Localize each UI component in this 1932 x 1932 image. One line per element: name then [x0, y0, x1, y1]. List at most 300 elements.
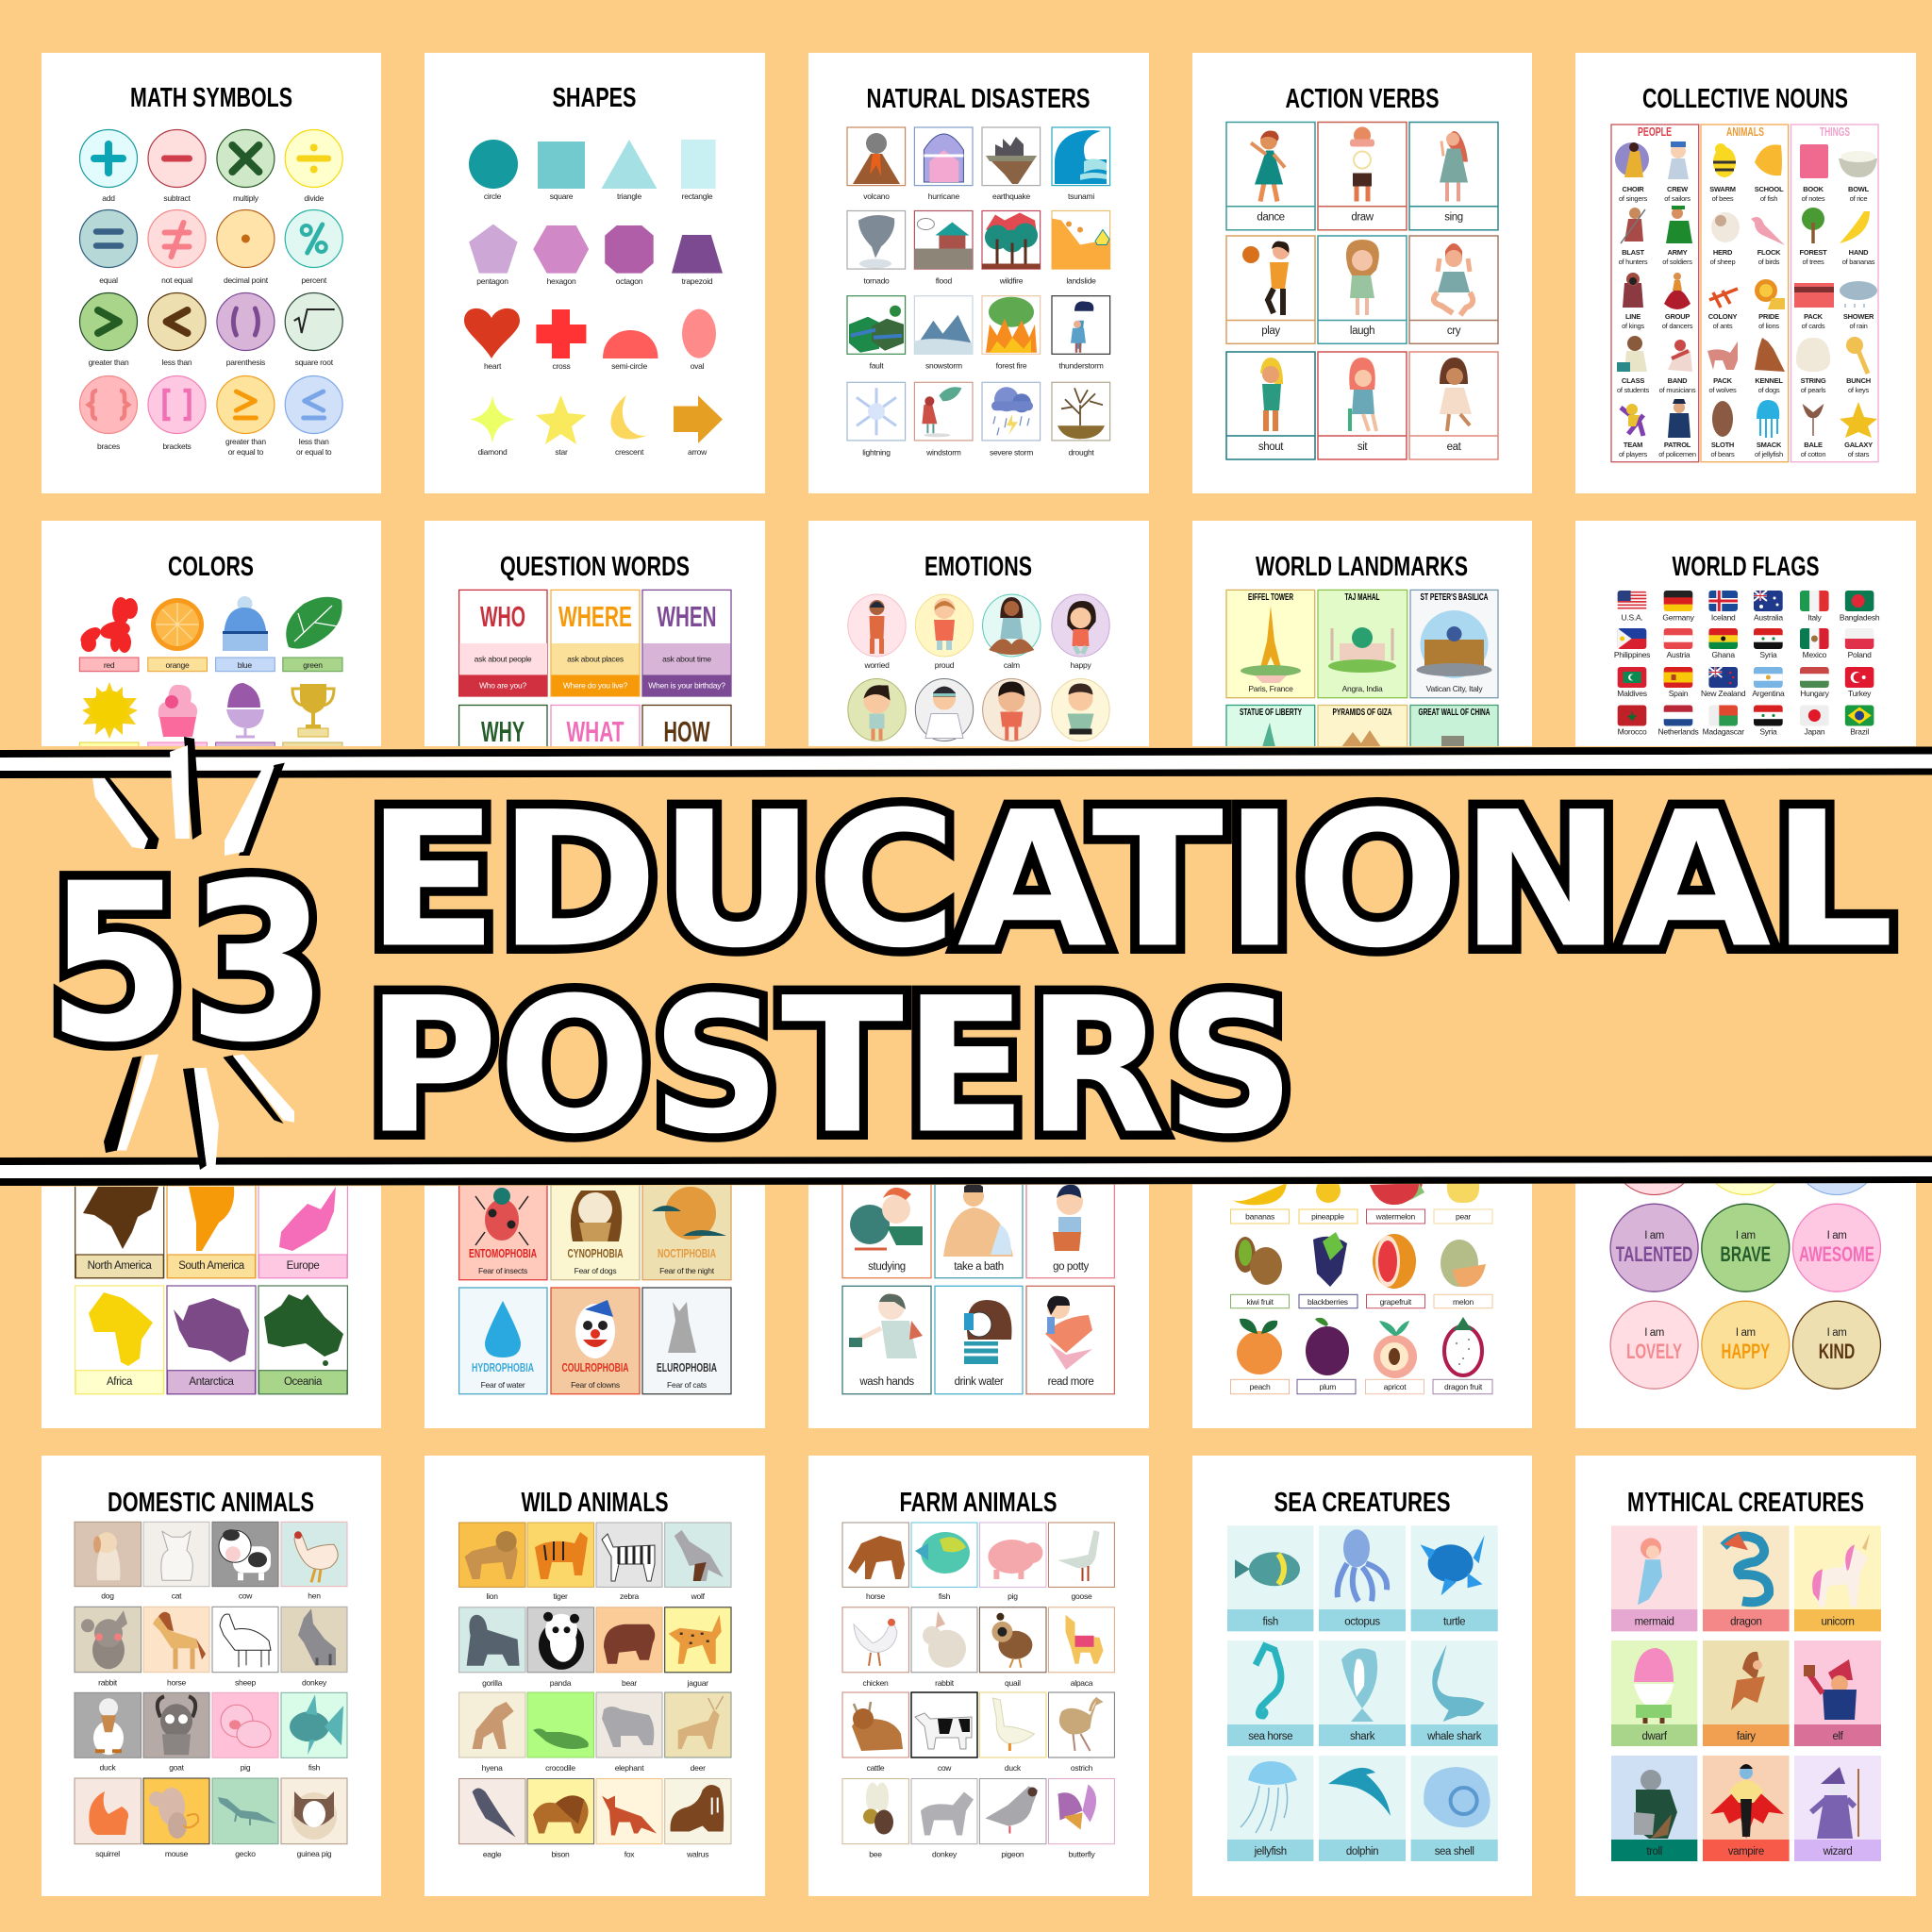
- card: goose: goose: [1072, 1591, 1092, 1601]
- heading: world landmarks: WORLD LANDMARKS: [1256, 552, 1468, 582]
- row 1 shapes: circle, square, triangle, rectangle: triangle: [617, 192, 641, 201]
- card: cynophobia: Fear of dogs: [575, 1266, 616, 1275]
- card: south america: South America: [178, 1260, 245, 1272]
- card: north america: [75, 1170, 164, 1278]
- flag: Spain: Spain: [1669, 689, 1689, 698]
- card: grapefruit: grapefruit: [1380, 1297, 1412, 1307]
- card: pyramids of giza: [1318, 706, 1407, 762]
- card: sea shell: [1411, 1756, 1498, 1861]
- card: bananas: bananas: [1245, 1211, 1274, 1221]
- card: play: [1226, 236, 1315, 343]
- card: panda: [527, 1607, 594, 1688]
- card: volcano: [847, 127, 906, 201]
- card: whale shark: [1411, 1641, 1498, 1746]
- row 4 shapes: diamond, star, crescent, arrow: crescent: [615, 447, 644, 457]
- circle: awesome: AWESOME: [1799, 1242, 1874, 1266]
- column: animals: ANIMALS: [1726, 125, 1764, 139]
- card: earthquake: earthquake: [992, 192, 1031, 201]
- icon: not equal: [148, 209, 206, 285]
- row 2 shapes: pentagon, hexagon, octagon, trapezoid: octagon: [616, 276, 643, 286]
- card: read more: read more: [1048, 1376, 1093, 1388]
- card: severe storm: severe storm: [990, 447, 1033, 457]
- card: mermaid: mermaid: [1635, 1616, 1674, 1627]
- column: people: of policemen: [1658, 450, 1696, 458]
- panel: emotions: [808, 521, 1149, 752]
- panel: math symbols: [42, 53, 381, 493]
- card: pineapple: pineapple: [1311, 1211, 1344, 1221]
- panel: world flags: [1575, 521, 1916, 752]
- icon: percent: [285, 209, 342, 285]
- card: shark: [1319, 1641, 1406, 1746]
- column: people: CREW: [1667, 185, 1689, 193]
- card: how: HOW: [664, 715, 710, 748]
- card: jellyfish: [1227, 1756, 1313, 1861]
- card: africa: [75, 1286, 164, 1394]
- icon: subtract: subtract: [163, 193, 191, 203]
- card: gecko: [212, 1778, 278, 1858]
- card: cat: cat: [172, 1591, 182, 1600]
- column: people: of musicians: [1659, 386, 1696, 394]
- circle: lovely: I am: [1644, 1327, 1664, 1339]
- column: things: of keys: [1848, 386, 1870, 394]
- column: things: of stars: [1848, 450, 1870, 458]
- icon: less than or equal: [285, 375, 342, 457]
- icon: equal: equal: [99, 275, 118, 285]
- flag: Hungary: Hungary: [1800, 689, 1830, 698]
- icon: add: add: [102, 193, 115, 203]
- card: where: ask about places: [567, 655, 624, 664]
- card: dwarf: [1611, 1641, 1697, 1746]
- card: vampire: [1703, 1756, 1790, 1861]
- card: when: ask about time: [662, 655, 711, 664]
- icon: surprised boy: [1052, 679, 1109, 741]
- card: fox: fox: [625, 1849, 635, 1858]
- card: melon: melon: [1453, 1297, 1474, 1307]
- row 3 shapes: heart, cross, semi-circle, oval: oval: [691, 361, 705, 371]
- icon: red balloon dog: red: [104, 660, 115, 670]
- card: africa: Africa: [107, 1376, 133, 1388]
- card: severe storm: [982, 382, 1041, 457]
- card: coulrophobia: [551, 1288, 640, 1394]
- column: people: of students: [1617, 386, 1649, 394]
- card: wildfire: wildfire: [999, 275, 1024, 285]
- card: eiffel tower: EIFFEL TOWER: [1248, 591, 1293, 603]
- card: quail: quail: [1005, 1678, 1021, 1688]
- card: unicorn: unicorn: [1822, 1616, 1854, 1627]
- circle: happy: [1702, 1301, 1790, 1389]
- card: octopus: octopus: [1344, 1616, 1380, 1627]
- column: things: of rice: [1850, 194, 1867, 203]
- card: troll: [1611, 1756, 1697, 1861]
- card: sheep: sheep: [235, 1677, 256, 1687]
- card: melon: [1434, 1240, 1492, 1308]
- card: dance: dance: [1257, 211, 1285, 223]
- column: animals: of jellyfish: [1755, 450, 1783, 458]
- card: donkey: donkey: [302, 1677, 327, 1687]
- card: fish: fish: [308, 1762, 321, 1772]
- panel: domestic animals: [42, 1456, 381, 1896]
- card: sea horse: sea horse: [1248, 1731, 1292, 1742]
- row 1 shapes: circle, square, triangle, rectangle: [469, 140, 716, 201]
- panel: farm animals: [808, 1456, 1149, 1896]
- icon: proud: proud: [935, 660, 955, 670]
- card: rabbit: rabbit: [935, 1678, 955, 1688]
- icon: brackets: [148, 375, 206, 451]
- card: how: [642, 706, 731, 762]
- panel: affirmations: [1575, 1108, 1916, 1428]
- icon: greater than or equal: [217, 375, 275, 457]
- card: fish: fish: [939, 1591, 951, 1601]
- card: sing: [1409, 123, 1498, 230]
- card: lightning: lightning: [862, 447, 891, 457]
- card: jaguar: jaguar: [687, 1678, 708, 1688]
- card: alpaca: [1049, 1607, 1114, 1688]
- card: fairy: fairy: [1737, 1731, 1756, 1742]
- card: bee: bee: [869, 1849, 882, 1858]
- row 3 shapes: heart, cross, semi-circle, oval: heart: [484, 361, 502, 371]
- circle: kind: KIND: [1819, 1340, 1855, 1363]
- column: animals: of fish: [1760, 194, 1777, 203]
- column: animals: of wolves: [1708, 386, 1737, 394]
- icon: annoyed boy: [983, 679, 1041, 741]
- circle: awesome: I am: [1827, 1230, 1846, 1241]
- flag: USA: [1618, 591, 1647, 623]
- card: jellyfish: jellyfish: [1254, 1846, 1287, 1857]
- icon: decimal point: decimal point: [224, 275, 269, 285]
- flag: Italy: Italy: [1807, 613, 1823, 623]
- card: whale shark: whale shark: [1426, 1731, 1482, 1742]
- flag: Maldives: Maldives: [1617, 689, 1647, 698]
- panel: sea creatures: [1192, 1456, 1532, 1896]
- flag: USA: U.S.A.: [1621, 613, 1643, 623]
- circle: kind: [1792, 1301, 1881, 1389]
- row 1 shapes: circle, square, triangle, rectangle: rectangle: [682, 192, 713, 201]
- card: donkey: [281, 1607, 347, 1687]
- card: lion: lion: [486, 1591, 498, 1601]
- card: pear: pear: [1456, 1211, 1471, 1221]
- flag: Japan: [1800, 706, 1829, 736]
- icon: greater than or equal: greater than: [225, 437, 266, 446]
- card: cow: [911, 1692, 977, 1773]
- card: eat: [1409, 352, 1498, 459]
- card: why: [459, 706, 547, 762]
- card: go potty: go potty: [1053, 1261, 1090, 1273]
- card: butterfly: butterfly: [1068, 1849, 1095, 1858]
- card: goose: [1049, 1523, 1114, 1601]
- heading: colors: COLORS: [168, 552, 254, 582]
- flag: Maldives: [1617, 667, 1647, 698]
- flag: Brazil: [1845, 706, 1874, 736]
- card: entomophobia: Fear of insects: [478, 1266, 527, 1275]
- card: hurricane: hurricane: [928, 192, 960, 201]
- icon: not equal: not equal: [161, 275, 192, 285]
- card: forest fire: [982, 296, 1041, 371]
- card: north america: North America: [88, 1260, 152, 1272]
- column: animals: KENNEL: [1755, 376, 1783, 385]
- circle: lovely: [1610, 1301, 1698, 1389]
- card: hurricane: [914, 127, 973, 201]
- circle: brave: [1702, 1204, 1790, 1291]
- icon: happy: [1052, 594, 1109, 670]
- column: animals: SCHOOL: [1755, 185, 1784, 193]
- card: unicorn: [1794, 1525, 1881, 1631]
- flag: Turkey: Turkey: [1848, 689, 1872, 698]
- icon: parenthesis: [217, 292, 275, 367]
- card: shark: shark: [1350, 1731, 1375, 1742]
- card: mouse: mouse: [165, 1849, 189, 1858]
- column: animals: of ants: [1713, 322, 1733, 330]
- flag: Argentina: Argentina: [1752, 689, 1785, 698]
- row 1 shapes: circle, square, triangle, rectangle: square: [550, 192, 574, 201]
- card: bison: [527, 1779, 594, 1858]
- card: hyena: hyena: [482, 1763, 503, 1773]
- card: noctiphobia: [642, 1170, 731, 1280]
- card: fault: [847, 296, 906, 371]
- card: donkey: donkey: [932, 1849, 958, 1858]
- heading: action verbs: ACTION VERBS: [1285, 84, 1440, 114]
- icon: braces: braces: [97, 441, 120, 451]
- row 2 shapes: pentagon, hexagon, octagon, trapezoid: [469, 225, 723, 286]
- card: horse: horse: [167, 1677, 187, 1687]
- row 4 shapes: diamond, star, crescent, arrow: arrow: [688, 447, 708, 457]
- card: europe: Europe: [287, 1260, 319, 1272]
- card: coulrophobia: Fear of clowns: [571, 1380, 620, 1390]
- flag: Argentina: [1752, 667, 1785, 698]
- row 3 shapes: heart, cross, semi-circle, oval: cross: [552, 361, 571, 371]
- icon: scared girl: [848, 679, 906, 741]
- icon: decimal point: [217, 209, 275, 285]
- card: jaguar: [665, 1607, 731, 1688]
- card: where: Where do you live?: [563, 681, 628, 691]
- heading: domestic animals: DOMESTIC ANIMALS: [108, 1488, 314, 1518]
- card: walrus: [665, 1779, 731, 1858]
- circle: partial yellow: [1702, 1108, 1790, 1194]
- panel: collective nouns: [1575, 53, 1916, 493]
- card: cynophobia: [551, 1170, 640, 1280]
- icon: worried: [848, 594, 906, 670]
- icon: green leaf: green: [303, 660, 323, 670]
- card: sheep: [212, 1607, 278, 1687]
- card: great wall of china: [1410, 706, 1498, 762]
- card: flood: flood: [936, 275, 953, 285]
- card: snowstorm: [914, 296, 973, 371]
- icon: square root: square root: [295, 358, 334, 367]
- row 3 shapes: heart, cross, semi-circle, oval: [464, 308, 716, 371]
- column: animals: SMACK: [1757, 441, 1782, 449]
- flag: Germany: Germany: [1662, 613, 1695, 623]
- card: st peter's basilica: Vatican City, Italy: [1426, 684, 1483, 693]
- icon: greater than or equal: or equal to: [228, 447, 264, 457]
- card: guinea pig: guinea pig: [297, 1849, 332, 1858]
- card: chicken: [842, 1607, 908, 1688]
- icon: greater than: [79, 292, 138, 367]
- flag: Morocco: Morocco: [1618, 726, 1647, 736]
- heading: math symbols: MATH SYMBOLS: [130, 83, 292, 113]
- card: fault: fault: [870, 361, 884, 371]
- card: apricot: apricot: [1384, 1382, 1407, 1391]
- row 4 shapes: diamond, star, crescent, arrow: star: [555, 447, 568, 457]
- card: volcano: volcano: [863, 192, 890, 201]
- flag: Iceland: Iceland: [1711, 613, 1736, 623]
- icon: parenthesis: parenthesis: [226, 358, 265, 367]
- card: where: [551, 590, 640, 696]
- circle: partial pink: [1610, 1108, 1698, 1194]
- card: dwarf: dwarf: [1642, 1731, 1668, 1742]
- card: duck: duck: [100, 1762, 116, 1772]
- flag: Ghana: Ghana: [1712, 650, 1735, 659]
- card: hen: hen: [308, 1591, 321, 1600]
- flag: Australia: Australia: [1754, 613, 1783, 623]
- icon: worried: worried: [863, 660, 890, 670]
- panel: action verbs: [1192, 53, 1532, 493]
- column: things: SHOWER: [1843, 312, 1874, 321]
- card: sea horse: [1227, 1641, 1313, 1746]
- card: eagle: eagle: [483, 1849, 502, 1858]
- card: crocodile: [527, 1692, 594, 1773]
- icon: less than: less than: [162, 358, 192, 367]
- card: tiger: [527, 1523, 594, 1601]
- circle: talented: [1610, 1204, 1698, 1291]
- icon: green leaf: [283, 597, 342, 672]
- column: things: STRING: [1801, 376, 1826, 385]
- column: things: of cards: [1802, 322, 1825, 330]
- card: thunderstorm: [1052, 296, 1110, 371]
- card: dragon: [1703, 1525, 1790, 1631]
- column: animals: HERD: [1713, 248, 1733, 257]
- card: statue of liberty: STATUE OF LIBERTY: [1240, 707, 1302, 718]
- card: laugh: laugh: [1350, 325, 1374, 337]
- icon: divide: [285, 130, 342, 203]
- card: goat: goat: [169, 1762, 185, 1772]
- card: elurophobia: [642, 1288, 731, 1394]
- card: where: WHERE: [558, 600, 632, 633]
- card: sing: sing: [1444, 211, 1463, 223]
- column: animals: of sheep: [1710, 258, 1735, 266]
- icon: blue hat: [216, 596, 275, 672]
- flag: Morocco: [1618, 706, 1647, 736]
- card: landslide: [1052, 211, 1110, 285]
- card: peach: peach: [1250, 1382, 1271, 1391]
- card: mermaid: [1611, 1525, 1697, 1631]
- card: eagle: [459, 1779, 525, 1858]
- card: snowstorm: snowstorm: [925, 361, 962, 371]
- panel: question words: [425, 521, 765, 762]
- card: watermelon: [1366, 1183, 1424, 1224]
- card: chicken: chicken: [862, 1678, 889, 1688]
- card: entomophobia: [459, 1170, 547, 1280]
- column: people: of singers: [1619, 194, 1648, 203]
- icon: proud: [915, 594, 974, 670]
- flag: Poland: [1845, 628, 1874, 659]
- column: people: PEOPLE: [1638, 125, 1672, 139]
- panel: good habits: [808, 1170, 1149, 1428]
- column: things: PACK: [1804, 312, 1824, 321]
- column: things: of notes: [1802, 194, 1825, 203]
- icon: orange: orange: [166, 660, 190, 670]
- flag: Japan: Japan: [1804, 726, 1825, 736]
- card: elephant: elephant: [615, 1763, 644, 1773]
- card: hen: [281, 1522, 347, 1600]
- flag: Netherlands: Netherlands: [1657, 726, 1699, 736]
- flag: Bangladesh: Bangladesh: [1840, 613, 1880, 623]
- card: europe: [258, 1170, 347, 1278]
- flag: Mexico: Mexico: [1803, 650, 1827, 659]
- card: squirrel: [75, 1778, 142, 1858]
- column: things: FOREST: [1800, 248, 1827, 257]
- card: st peter's basilica: ST PETER'S BASILICA: [1421, 591, 1489, 603]
- card: crocodile: crocodile: [545, 1763, 575, 1773]
- circle: talented: TALENTED: [1616, 1242, 1692, 1266]
- card: dog: dog: [101, 1591, 114, 1600]
- card: pig: [979, 1523, 1046, 1601]
- card: peach: [1230, 1319, 1289, 1394]
- card: goat: [143, 1692, 209, 1772]
- flag: Syria repeat: Syria: [1759, 726, 1777, 736]
- card: dolphin: [1319, 1756, 1406, 1861]
- panel: mythical creatures: [1575, 1456, 1916, 1896]
- circle: happy: I am: [1736, 1327, 1756, 1339]
- card: pig: pig: [241, 1762, 251, 1772]
- flag: Brazil: Brazil: [1850, 726, 1869, 736]
- card: who: Who are you?: [479, 681, 526, 691]
- row 2 shapes: pentagon, hexagon, octagon, trapezoid: hexagon: [547, 276, 576, 286]
- card: duck: duck: [1005, 1763, 1022, 1773]
- icon: percent: percent: [301, 275, 327, 285]
- panel: colors: [42, 521, 381, 752]
- card: bear: [596, 1607, 662, 1688]
- column: animals: of birds: [1758, 258, 1780, 266]
- row 1 shapes: circle, square, triangle, rectangle: circle: [484, 192, 502, 201]
- column: animals: [1701, 125, 1789, 462]
- column: people: CLASS: [1622, 376, 1644, 385]
- card: tsunami: [1052, 127, 1110, 201]
- column: people: ARMY: [1667, 248, 1688, 257]
- column: animals: FLOCK: [1757, 248, 1781, 257]
- card: elurophobia: Fear of cats: [667, 1380, 707, 1390]
- card: cow: cow: [239, 1591, 253, 1600]
- icon: multiply: [217, 130, 275, 203]
- card: panda: panda: [550, 1678, 572, 1688]
- card: rabbit: [75, 1607, 142, 1687]
- icon: yellow sun: [79, 682, 139, 750]
- column: things: [1790, 125, 1878, 462]
- card: studying: [842, 1170, 931, 1278]
- circle: partial blue: [1792, 1108, 1881, 1194]
- card: taj mahal: TAJ MAHAL: [1345, 591, 1380, 603]
- card: butterfly: [1049, 1779, 1114, 1858]
- heading: emotions: EMOTIONS: [924, 552, 1032, 582]
- card: draw: [1318, 123, 1407, 230]
- icon: pink cupcake: [148, 685, 208, 750]
- column: animals: of dogs: [1758, 386, 1780, 394]
- card: hydrophobia: [459, 1288, 547, 1394]
- card: pyramids of giza: PYRAMIDS OF GIZA: [1332, 707, 1392, 718]
- column: people: of kings: [1622, 322, 1644, 330]
- card: elf: elf: [1833, 1731, 1844, 1742]
- heading: question words: QUESTION WORDS: [500, 552, 690, 582]
- column: people: of players: [1619, 450, 1648, 458]
- card: fox: [596, 1779, 662, 1858]
- column: things: of rain: [1849, 322, 1868, 330]
- icon: blue hat: blue: [238, 660, 252, 670]
- flag: Italy: [1800, 591, 1829, 623]
- icon: square root: [285, 292, 342, 367]
- card: rabbit: rabbit: [98, 1677, 118, 1687]
- icon: brackets: brackets: [162, 441, 192, 451]
- card: read more: [1026, 1286, 1114, 1394]
- column: things: of cotton: [1801, 450, 1825, 458]
- flag: Turkey: [1845, 667, 1874, 698]
